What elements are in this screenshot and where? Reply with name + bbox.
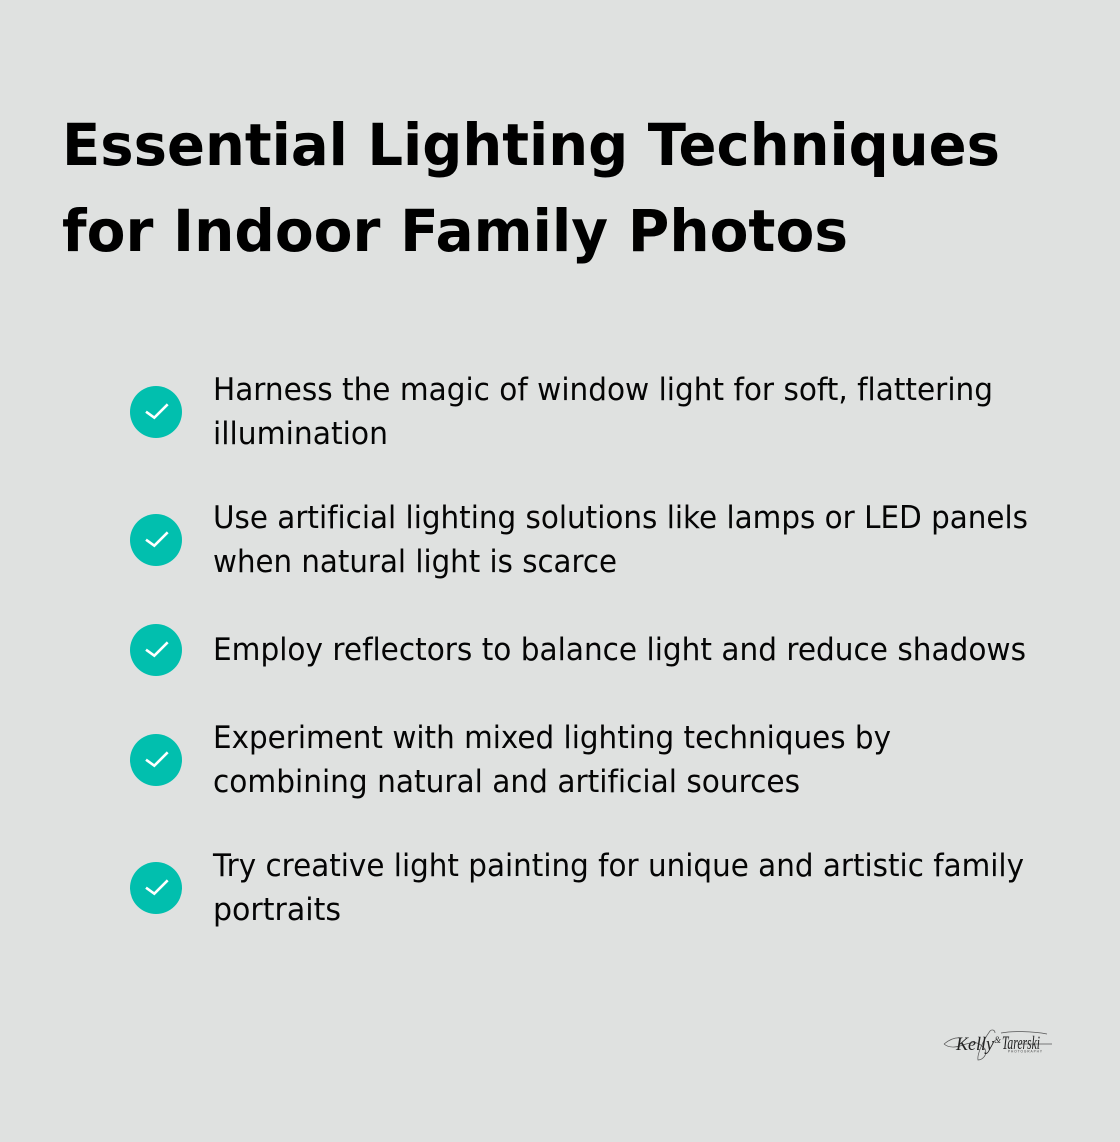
logo: signature: Tarerski bbox=[1002, 1033, 1040, 1054]
item 2: artificial lighting bbox=[130, 500, 1028, 580]
text: light painting: Try creative light painting for unique and artistic family bbox=[212, 848, 1024, 884]
text: artificial lighting: when natural light is scarce bbox=[213, 544, 617, 580]
text: artificial lighting: Use artificial lighting solutions like lamps or LED panels bbox=[213, 500, 1028, 536]
title: Essential Lighting Techniques bbox=[62, 111, 1000, 179]
icon: check circle bbox=[130, 514, 182, 566]
icon: check circle bbox=[130, 624, 182, 676]
icon: check circle bbox=[130, 734, 182, 786]
item 1: window light bbox=[130, 372, 993, 452]
logo: signature bbox=[944, 1030, 1052, 1060]
title: for Indoor Family Photos bbox=[62, 197, 848, 265]
checklist bbox=[130, 372, 1028, 928]
logo: signature: PHOTOGRAPHY bbox=[1008, 1050, 1043, 1054]
text: mixed lighting: Experiment with mixed lighting techniques by bbox=[213, 720, 891, 756]
item 5: light painting bbox=[130, 848, 1024, 928]
text: window light: illumination bbox=[213, 416, 388, 452]
text: reflectors: Employ reflectors to balance light and reduce shadows bbox=[213, 632, 1026, 668]
text: light painting bbox=[212, 848, 1024, 928]
text: light painting: portraits bbox=[213, 892, 341, 928]
item 3: reflectors bbox=[130, 624, 1026, 676]
text: window light: Harness the magic of window light for soft, flattering bbox=[213, 372, 993, 408]
icon: check circle bbox=[130, 386, 182, 438]
logo: signature: & bbox=[994, 1035, 1001, 1045]
item 4: mixed lighting bbox=[130, 720, 891, 800]
logo: signature: Kelly bbox=[955, 1034, 995, 1055]
title bbox=[62, 111, 1000, 265]
text: window light bbox=[213, 372, 993, 452]
text: mixed lighting bbox=[213, 720, 891, 800]
text: mixed lighting: combining natural and artificial sources bbox=[213, 764, 800, 800]
text: artificial lighting bbox=[213, 500, 1028, 580]
icon: check circle bbox=[130, 862, 182, 914]
